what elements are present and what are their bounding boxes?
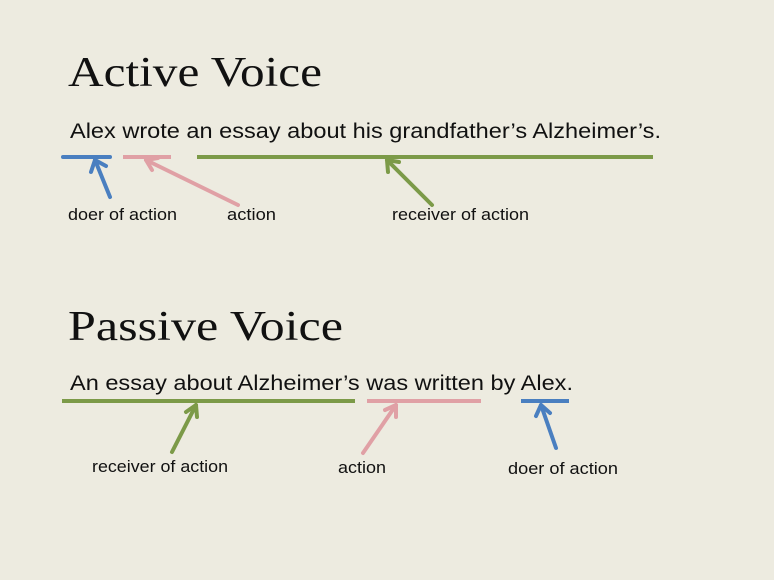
arrow: receiver (172, 405, 197, 452)
labels: active: receiver of action (392, 205, 529, 224)
labels: passive: doer of action (508, 459, 618, 478)
title: Active Voice: Active Voice (68, 50, 322, 96)
underline: action (pink) (123, 155, 171, 159)
underline: doer (blue) (521, 399, 569, 403)
sentence: passive: An essay about Alzheimer’s was written by Alex. (70, 372, 573, 395)
arrow: action (363, 405, 396, 453)
arrow: receiver (387, 160, 432, 205)
arrow: doer (536, 405, 556, 448)
arrow: action (146, 158, 238, 205)
underline: receiver (green) (197, 155, 653, 159)
labels: active: action (227, 205, 276, 224)
underline: receiver (green) (62, 399, 355, 403)
labels: passive (92, 457, 618, 478)
underline: doer (blue) (63, 155, 110, 159)
labels: passive: receiver of action (92, 457, 228, 476)
labels: active (68, 205, 529, 224)
underline: action (pink) (367, 399, 481, 403)
labels: active: doer of action (68, 205, 177, 224)
sentence: active: Alex wrote an essay about his grandfather’s Alzheimer’s. (70, 120, 661, 143)
title: Passive Voice: Passive Voice (68, 304, 343, 350)
labels: passive: action (338, 458, 386, 477)
arrow: doer (91, 160, 110, 197)
